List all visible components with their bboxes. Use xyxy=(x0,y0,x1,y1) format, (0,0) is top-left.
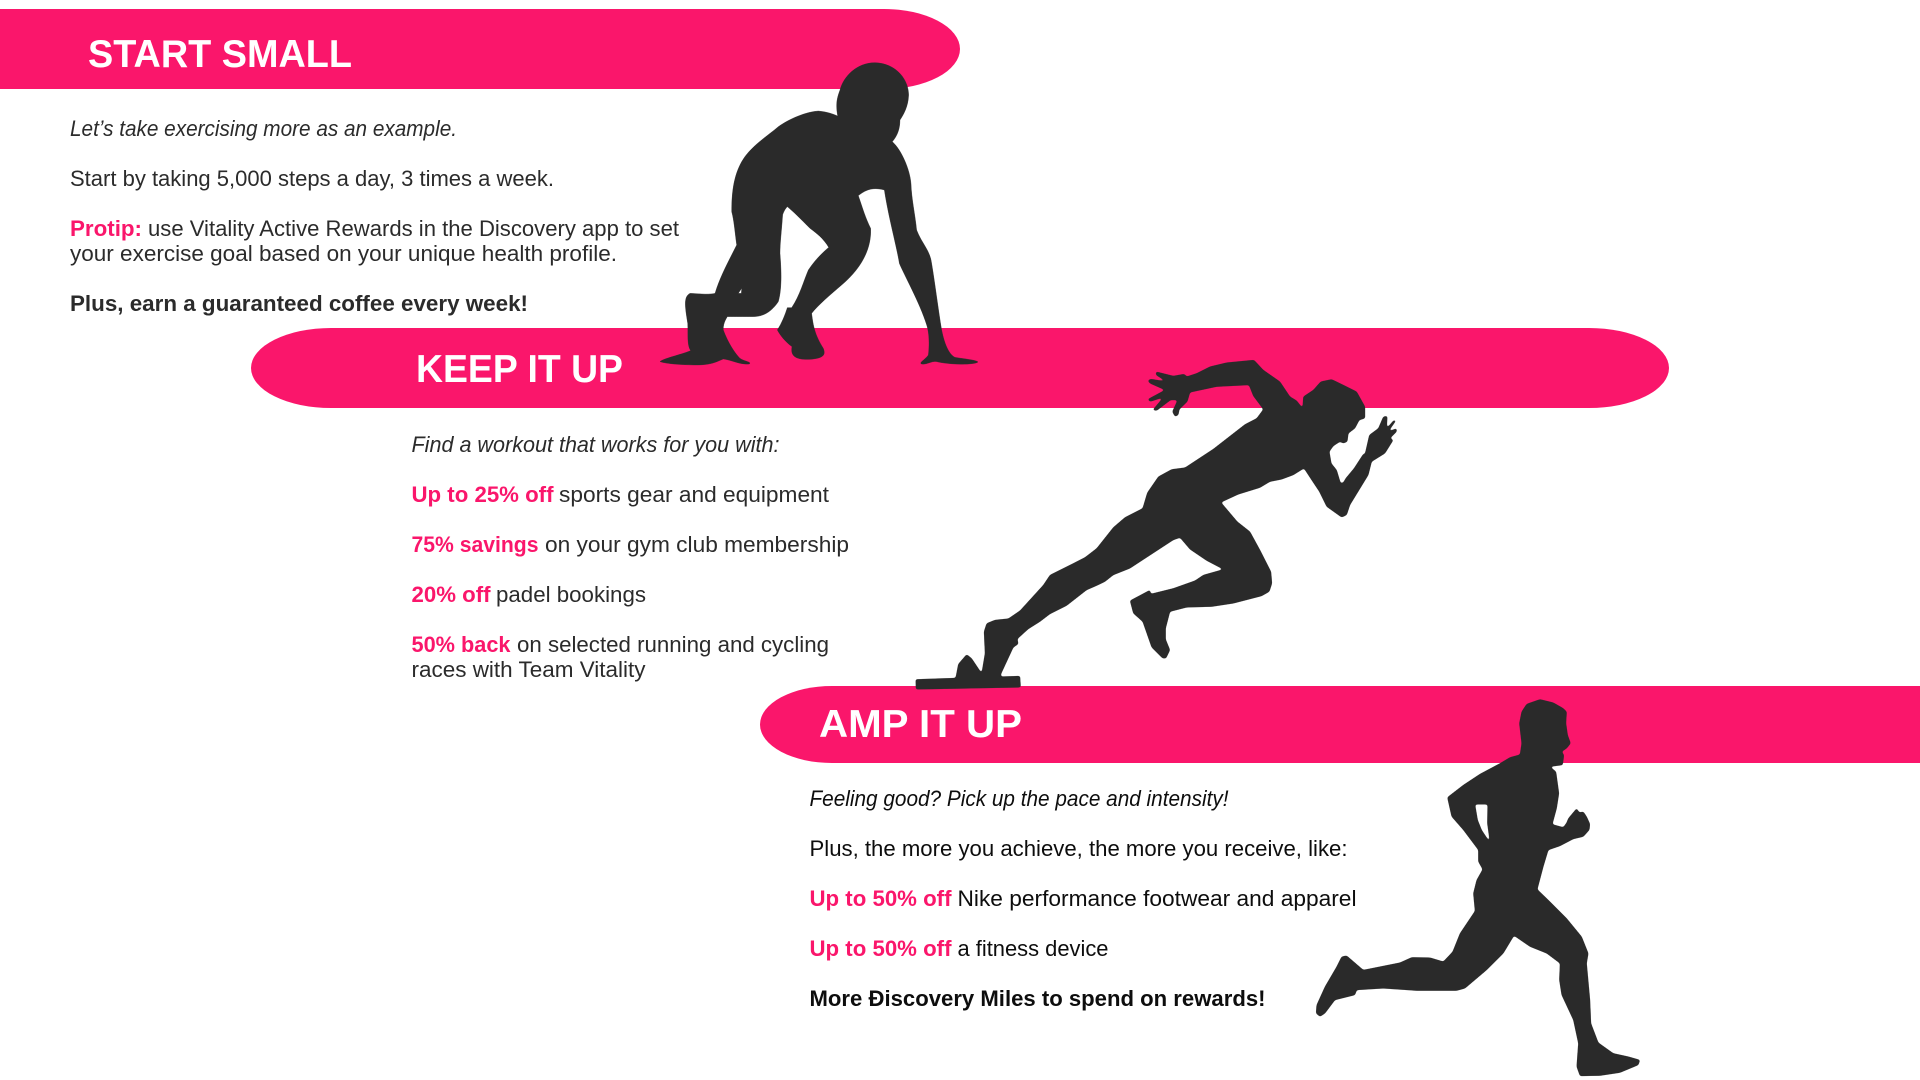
gym savings label: 75% savings xyxy=(412,532,538,557)
heading: amp it up: AMP IT UP xyxy=(819,703,1022,746)
nike discount text: Nike performance footwear and apparel xyxy=(958,886,1356,911)
padel discount label: 20% off xyxy=(412,582,491,607)
nike discount label: Up to 50% off xyxy=(810,886,952,911)
gear discount label: Up to 25% off xyxy=(412,482,554,507)
heading: start small: START SMALL xyxy=(88,33,352,76)
text block: start small xyxy=(70,116,679,316)
races cashback text line two: races with Team Vitality xyxy=(412,657,646,682)
icon: sprinter leaving starting block silhouette xyxy=(916,360,1397,689)
protip text line two: your exercise goal based on your unique health profile. xyxy=(70,241,617,266)
protip text line one: use Vitality Active Rewards in the Discovery app to set xyxy=(148,216,679,241)
intro line: Let’s take exercising more as an example. xyxy=(70,116,457,141)
gym savings text: on your gym club membership xyxy=(545,532,849,557)
step line: Start by taking 5,000 steps a day, 3 times a week. xyxy=(70,166,554,191)
coffee line: Plus, earn a guaranteed coffee every week! xyxy=(70,291,528,316)
icon: running man silhouette xyxy=(1316,699,1640,1076)
text block: keep it up xyxy=(412,432,849,682)
intro line: Feeling good? Pick up the pace and intensity! xyxy=(810,786,1228,811)
device discount text: a fitness device xyxy=(958,936,1108,961)
banner: keep it up xyxy=(251,328,1669,408)
miles line: More Ðiscovery Miles to spend on rewards! xyxy=(810,986,1266,1011)
padel discount text: padel bookings xyxy=(496,582,646,607)
races cashback label: 50% back xyxy=(412,632,511,657)
intro line: Find a workout that works for you with: xyxy=(412,432,780,457)
text block: amp it up xyxy=(810,786,1356,1011)
heading: keep it up: KEEP IT UP xyxy=(416,348,623,391)
device discount label: Up to 50% off xyxy=(810,936,952,961)
banner: start small xyxy=(0,9,960,89)
protip label: Protip: xyxy=(70,216,142,241)
achievement line: Plus, the more you achieve, the more you receive, like: xyxy=(810,836,1348,861)
races cashback text line one: on selected running and cycling xyxy=(517,632,829,657)
gear discount text: sports gear and equipment xyxy=(559,482,829,507)
banner: amp it up xyxy=(760,686,1920,763)
icon: crouching sprinter silhouette xyxy=(660,63,978,365)
